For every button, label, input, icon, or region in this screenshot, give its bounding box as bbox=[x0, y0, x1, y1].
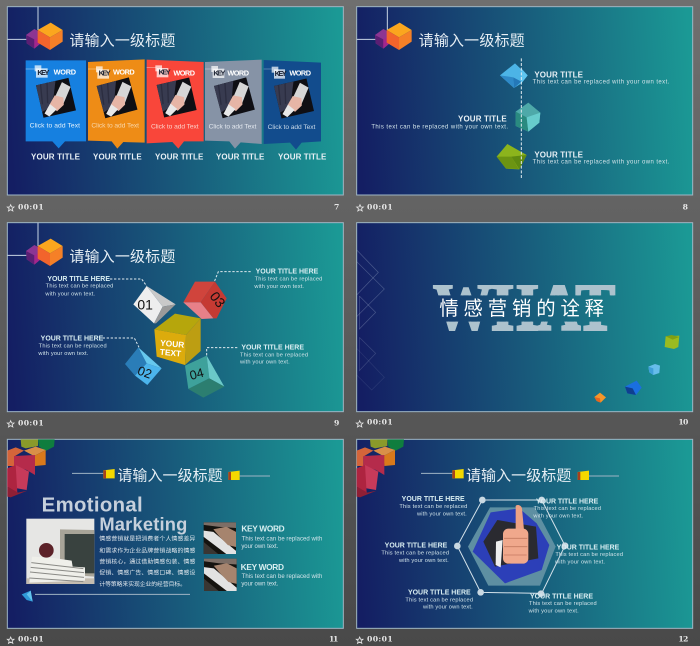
slide 7 background bbox=[7, 7, 343, 195]
callout bottom left bbox=[405, 589, 473, 611]
callout 03 text: YOUR TITLE HERE bbox=[256, 269, 319, 276]
cube 04: 04 bbox=[188, 366, 205, 383]
card 5 navy: KEY bbox=[275, 69, 287, 78]
header line with yellow cube left bbox=[72, 469, 115, 478]
paragraph: 计等策略来实现企业的经营目标。 bbox=[99, 580, 186, 588]
hexagon nodes bbox=[454, 497, 568, 597]
cube 02: 02 bbox=[136, 364, 154, 382]
card captions bbox=[31, 153, 327, 162]
callout 04 text bbox=[239, 345, 308, 366]
card 1 blue: WORD bbox=[54, 68, 76, 77]
photo: apple and books bbox=[26, 519, 94, 584]
heading: 请输入一级标题 bbox=[69, 33, 175, 50]
key word 2: This text can be replaced with bbox=[242, 574, 322, 580]
key word 2: your own text. bbox=[241, 582, 279, 588]
slide 9 background bbox=[7, 223, 343, 412]
text block top right bbox=[533, 71, 670, 85]
panel: slide 12 hexagon diagram bbox=[356, 439, 693, 644]
cube 01 bbox=[133, 286, 176, 323]
footer: time and page number: 12 bbox=[678, 635, 688, 644]
callout top right: with your own text. bbox=[532, 514, 583, 520]
paragraph: 营销核心，通过借助情感包装、情感 bbox=[99, 557, 195, 565]
dashed timeline bbox=[520, 58, 523, 179]
card 5 navy: Click to add Text bbox=[268, 124, 315, 131]
heading: 请输入一级标题 bbox=[419, 33, 525, 50]
footer: time and page number bbox=[7, 635, 338, 644]
icon: blue gem bbox=[22, 591, 33, 602]
card 2 orange: WORD bbox=[113, 68, 135, 77]
footer: time and page number: 00:01 bbox=[18, 418, 44, 427]
icon: green cube bbox=[497, 144, 527, 169]
section title: 情感营销的诠释 bbox=[439, 298, 604, 320]
header line with yellow cube right bbox=[578, 471, 619, 480]
card captions: YOUR TITLE bbox=[278, 153, 327, 162]
text block bottom right: YOUR TITLE bbox=[534, 151, 584, 160]
card captions: YOUR TITLE bbox=[31, 153, 81, 162]
decorative header lines and logo cubes bbox=[7, 223, 63, 266]
panel: slide 7 key word cards bbox=[7, 7, 343, 211]
icon: orange cube bbox=[594, 393, 606, 403]
footer: time and page number: 11 bbox=[329, 635, 338, 644]
footer: time and page number: 00:01 bbox=[367, 202, 393, 211]
cube 02 bbox=[125, 347, 162, 385]
card 3 red: Click to add Text bbox=[151, 123, 199, 130]
callout middle right bbox=[554, 544, 623, 566]
callout middle right: YOUR TITLE HERE bbox=[557, 544, 620, 551]
header line with yellow cube right bbox=[228, 471, 270, 480]
callout 02 text: YOUR TITLE HERE bbox=[41, 336, 104, 343]
card 1 blue: Click to add Text bbox=[30, 122, 80, 129]
callout top right: This text can be replaced bbox=[534, 506, 601, 512]
footer: time and page number bbox=[356, 635, 688, 644]
footer: time and page number: 7 bbox=[334, 202, 339, 211]
callout 04 text: This text can be replaced bbox=[240, 352, 308, 358]
text block bottom right: This text can be replaced with your own text. bbox=[533, 159, 670, 165]
callout bottom right: This text can be replaced bbox=[529, 601, 597, 607]
cube 03 bbox=[183, 282, 229, 319]
callout top left: YOUR TITLE HERE bbox=[402, 496, 465, 503]
footer: time and page number bbox=[7, 418, 339, 427]
inner filled hexagon bbox=[468, 507, 556, 586]
paragraph: 促销、情感广告、情感口碑、情感设 bbox=[99, 569, 195, 577]
card 3 red: WORD bbox=[173, 68, 195, 77]
footer: time and page number bbox=[357, 202, 688, 211]
card 5 navy: WORD bbox=[289, 69, 311, 78]
icon: blue cube bbox=[500, 63, 528, 88]
callout 03 text bbox=[253, 269, 322, 290]
callout bottom right: with your own text. bbox=[528, 609, 579, 615]
callout bottom left: with your own text. bbox=[422, 605, 473, 611]
callout top right: YOUR TITLE HERE bbox=[536, 498, 599, 505]
text block top right: YOUR TITLE bbox=[534, 71, 584, 80]
card 4 grey bbox=[205, 60, 262, 149]
callout 01 text: YOUR TITLE HERE bbox=[47, 276, 110, 283]
center yellow cube: TEXT bbox=[159, 347, 182, 359]
callout bottom right: YOUR TITLE HERE bbox=[530, 593, 593, 600]
text block middle left: YOUR TITLE bbox=[458, 114, 507, 123]
decorative header lines and logo cubes bbox=[357, 7, 412, 50]
panel: slide 8 three cubes on timeline bbox=[357, 7, 693, 211]
card captions: YOUR TITLE bbox=[155, 153, 204, 162]
callout 02 text bbox=[37, 336, 107, 357]
callout 01 text: This text can be replaced bbox=[46, 284, 113, 290]
footer: time and page number bbox=[7, 202, 339, 211]
callout bottom right bbox=[528, 593, 597, 615]
paragraph: 和需求作为企业品牌营销战略的情感 bbox=[99, 546, 195, 554]
footer: time and page number: 8 bbox=[683, 202, 688, 211]
icon: green cube bbox=[665, 335, 679, 349]
callout top left: with your own text. bbox=[416, 511, 467, 517]
callout 03 text: This text can be replaced bbox=[255, 276, 322, 282]
thumbnail 2 bbox=[204, 559, 237, 591]
card 4 grey: Click to add Text bbox=[209, 123, 256, 130]
corner cubes bbox=[357, 439, 404, 497]
card 3 red bbox=[147, 60, 204, 149]
icon: light blue cube bbox=[648, 364, 660, 375]
footer: time and page number bbox=[356, 417, 688, 427]
callout 01 text bbox=[44, 276, 113, 297]
footer: time and page number: 9 bbox=[334, 418, 339, 427]
heading: 请输入一级标题 bbox=[69, 249, 175, 266]
key word 1: your own text. bbox=[241, 544, 279, 550]
slide 10 background bbox=[357, 223, 693, 412]
callout middle right: This text can be replaced bbox=[555, 552, 623, 558]
key word 1 bbox=[241, 523, 322, 550]
panel: slide 11 emotional marketing bbox=[7, 439, 343, 644]
text block middle left bbox=[371, 114, 508, 131]
icon: teal cube bbox=[516, 103, 540, 132]
cube 03: 03 bbox=[207, 288, 229, 311]
paragraph: 情感营销就是把消费者个人情感差异 bbox=[99, 535, 195, 543]
callout middle left: YOUR TITLE HERE bbox=[385, 543, 448, 550]
callout middle left: This text can be replaced bbox=[381, 551, 449, 557]
big title Marketing: Marketing bbox=[99, 514, 187, 535]
key word 2 bbox=[241, 562, 322, 588]
callout top left bbox=[399, 496, 467, 517]
paragraph bbox=[99, 535, 195, 588]
callout 02 text: This text can be replaced bbox=[39, 343, 107, 349]
footer: time and page number: 10 bbox=[678, 417, 688, 426]
callout middle right: with your own text. bbox=[554, 560, 605, 566]
footer: time and page number: 00:01 bbox=[18, 635, 44, 644]
outer hexagon outline bbox=[457, 500, 565, 593]
header line with yellow cube left bbox=[421, 469, 464, 478]
card 4 grey: KEY bbox=[213, 68, 225, 77]
text block top right: This text can be replaced with your own text. bbox=[533, 79, 670, 85]
dashed connectors bbox=[103, 272, 251, 357]
cube 01: 01 bbox=[137, 296, 153, 312]
thumbnail 1 bbox=[204, 522, 236, 554]
callout 04 text: with your own text. bbox=[239, 360, 290, 366]
callout 04 text: YOUR TITLE HERE bbox=[241, 345, 304, 352]
callout middle left bbox=[381, 543, 449, 564]
decorative diamond outlines bbox=[357, 250, 384, 390]
card 2 orange bbox=[88, 59, 145, 149]
panel: slide 10 section title bbox=[356, 223, 693, 427]
callout 03 text: with your own text. bbox=[253, 284, 304, 290]
callout bottom left: YOUR TITLE HERE bbox=[408, 589, 471, 596]
key word 2: KEY WORD bbox=[241, 562, 284, 572]
heading: 请输入一级标题 bbox=[117, 468, 223, 485]
slide 12 background bbox=[357, 439, 693, 628]
corner cubes bbox=[7, 439, 55, 497]
callout bottom left: This text can be replaced bbox=[405, 597, 473, 603]
card 1 blue bbox=[26, 60, 86, 148]
card 1 blue: KEY bbox=[37, 68, 49, 77]
cube 04 bbox=[185, 356, 224, 398]
icon: blue cube bbox=[625, 381, 642, 395]
big title Emotional: Emotional bbox=[42, 495, 143, 517]
thumbs up photo in blue frame bbox=[473, 505, 549, 583]
callout 02 text: with your own text. bbox=[37, 351, 89, 357]
callout middle left: with your own text. bbox=[398, 558, 449, 564]
WHAT background word: WHAT bbox=[433, 269, 615, 345]
slide 11 background bbox=[7, 439, 343, 628]
divider line bbox=[35, 593, 190, 596]
key word 1: KEY WORD bbox=[241, 523, 285, 533]
card 2 orange: KEY bbox=[99, 68, 111, 77]
key word 1: This text can be replaced with bbox=[242, 536, 322, 542]
footer: time and page number: 00:01 bbox=[18, 202, 44, 211]
heading: 请输入一级标题 bbox=[466, 468, 571, 485]
decorative header lines and logo cubes bbox=[7, 7, 63, 50]
text block middle left: This text can be replaced with your own text. bbox=[371, 125, 508, 131]
center yellow cube: YOUR bbox=[160, 338, 185, 350]
footer: time and page number: 00:01 bbox=[367, 417, 393, 426]
panel: slide 9 four numbered cubes bbox=[7, 223, 343, 427]
card captions: YOUR TITLE bbox=[216, 153, 265, 162]
card 3 red: KEY bbox=[159, 68, 171, 77]
card 2 orange: Click to add Text bbox=[91, 123, 139, 130]
callout top right bbox=[532, 498, 601, 520]
card 4 grey: WORD bbox=[227, 68, 249, 77]
slide 8 background bbox=[357, 7, 693, 195]
center yellow cube bbox=[154, 314, 201, 365]
callout top left: This text can be replaced bbox=[399, 504, 467, 510]
footer: time and page number: 00:01 bbox=[367, 635, 393, 644]
card captions: YOUR TITLE bbox=[93, 153, 142, 162]
callout 01 text: with your own text. bbox=[44, 291, 95, 297]
card 5 navy bbox=[264, 60, 321, 150]
text block bottom right bbox=[533, 151, 670, 165]
